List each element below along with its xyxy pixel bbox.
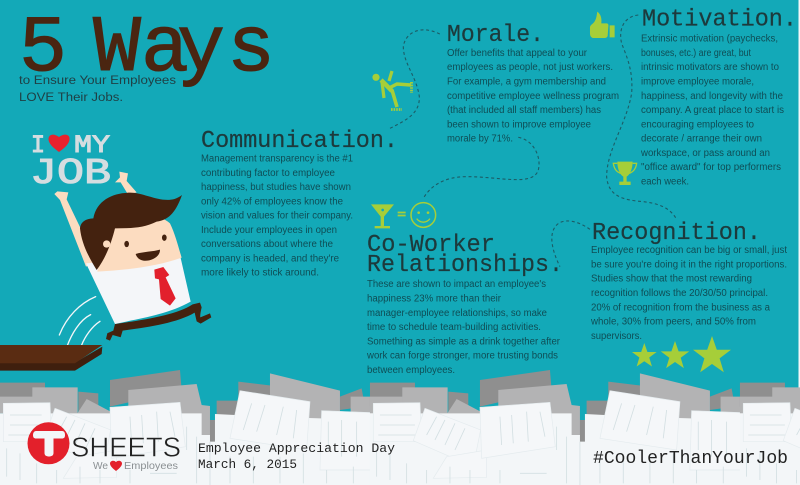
section: motivation: intrinsic motivators are shown to xyxy=(641,62,779,73)
logo: TSheets: We xyxy=(93,460,108,472)
icon: skater slipping xyxy=(372,71,412,110)
section: recognition: Studies show that the most rewarding xyxy=(591,274,752,285)
icon: thumbs up xyxy=(590,12,615,38)
dashed connector: co-worker to recognition xyxy=(552,221,590,267)
section: recognition: Recognition. xyxy=(592,220,761,247)
dashed connector: morale to co-worker xyxy=(423,137,539,198)
section: motivation: Motivation. xyxy=(642,6,797,34)
section: motivation: Extrinsic motivation (paychecks, xyxy=(641,34,778,44)
section: co-worker relationships: Something as simple as a drink together after xyxy=(367,336,561,347)
icon: martini equals smiley xyxy=(371,203,436,228)
event date: Employee Appreciation Day xyxy=(198,441,395,456)
dashed connector: communication to morale xyxy=(390,30,442,128)
section: co-worker relationships: happiness 23% more than their xyxy=(367,294,502,304)
dashed connector: motivation to recognition xyxy=(607,15,677,220)
section: motivation: each week. xyxy=(641,176,689,188)
section: morale: been shown to improve employee xyxy=(447,119,591,130)
section: morale: employees as people, not just workers. xyxy=(447,62,613,73)
section: co-worker relationships: manager-employee relationships, so make xyxy=(367,308,547,319)
section: recognition: recognition follows the 20/30/50 principal. xyxy=(591,288,768,299)
section: morale: competitive employee wellness program xyxy=(447,91,619,102)
hashtag: #CoolerThanYourJob xyxy=(593,449,788,469)
section: motivation: encouraging employees to xyxy=(641,119,754,130)
section: communication: Include your employees in open xyxy=(201,225,337,236)
logo: TSheets xyxy=(28,422,181,472)
section: motivation xyxy=(640,6,797,188)
illustration: jumping employee xyxy=(0,172,211,371)
section: motivation: bonuses, etc.) are great, but xyxy=(641,48,751,59)
section: communication: Management transparency is the #1 xyxy=(201,154,353,164)
section: morale: For example, a gym membership and xyxy=(447,76,606,88)
section: co-worker relationships: Co-Worker xyxy=(367,232,495,259)
section: motivation: decorate / arrange their own xyxy=(641,134,762,145)
diving board xyxy=(0,345,102,371)
section: motivation: improve employee morale, xyxy=(641,76,754,88)
section: morale: morale by 71%. xyxy=(447,134,513,145)
section: morale: Morale. xyxy=(447,22,544,49)
section: co-worker relationships xyxy=(366,232,563,376)
title: 5 Ways xyxy=(0,4,275,95)
logo: TSheets: Employees xyxy=(124,460,178,472)
section: recognition: whole, 30% from peers, and 50% from xyxy=(590,317,756,328)
title: LOVE Their Jobs. xyxy=(19,90,123,104)
section: co-worker relationships: time to schedule team-building activities. xyxy=(367,322,541,333)
section: communication: more likely to stick around. xyxy=(201,268,319,278)
section: co-worker relationships: work can forge stronger, more trusting bonds xyxy=(366,350,558,362)
section: communication: contributing factor to employee xyxy=(201,168,335,179)
section: co-worker relationships: These are shown to impact an employee's xyxy=(367,279,546,290)
logo: TSheets: SHEETS xyxy=(71,432,181,462)
section: motivation: company. A great place to start is xyxy=(641,105,784,116)
section: recognition: 20% of recognition from the business as a xyxy=(591,302,770,313)
event date xyxy=(198,441,395,472)
section: motivation: "office award" for top performers xyxy=(641,162,781,173)
icon: heart xyxy=(48,135,70,152)
I love my job sign: I xyxy=(31,131,45,160)
section: communication: conversations about where the xyxy=(201,239,333,250)
section: motivation: happiness, and longevity with the xyxy=(641,91,783,102)
section: communication: happiness, but studies have shown xyxy=(201,182,351,193)
section: communication: vision and values for their company. xyxy=(201,210,353,222)
section: communication: only 42% of employees know the xyxy=(201,196,343,207)
section: recognition: supervisors. xyxy=(591,331,642,342)
section: co-worker relationships: Relationships. xyxy=(367,252,563,279)
section: recognition: Employee recognition can be big or small, just xyxy=(591,245,787,256)
paper pile xyxy=(0,370,800,485)
section: communication xyxy=(201,128,398,278)
section: recognition: be sure you're doing it in the right proportions. xyxy=(591,259,787,270)
icon: three stars xyxy=(632,336,731,372)
icon: trophy xyxy=(613,162,637,185)
I love my job sign: MY xyxy=(74,131,110,160)
I love my job sign xyxy=(30,131,111,194)
section: co-worker relationships: between employees. xyxy=(367,365,455,376)
section: morale: (that included all staff members) has xyxy=(447,105,601,116)
I love my job sign: JOB xyxy=(30,153,111,194)
section: communication: Communication. xyxy=(201,128,398,155)
section: morale xyxy=(447,22,619,145)
section: recognition xyxy=(590,220,787,342)
title: to Ensure Your Employees xyxy=(19,73,176,87)
section: communication: company is headed, and they're xyxy=(201,253,339,264)
event date: March 6, 2015 xyxy=(198,457,297,472)
section: morale: Offer benefits that appeal to your xyxy=(447,48,588,59)
section: motivation: workspace, or pass around an xyxy=(640,148,770,159)
